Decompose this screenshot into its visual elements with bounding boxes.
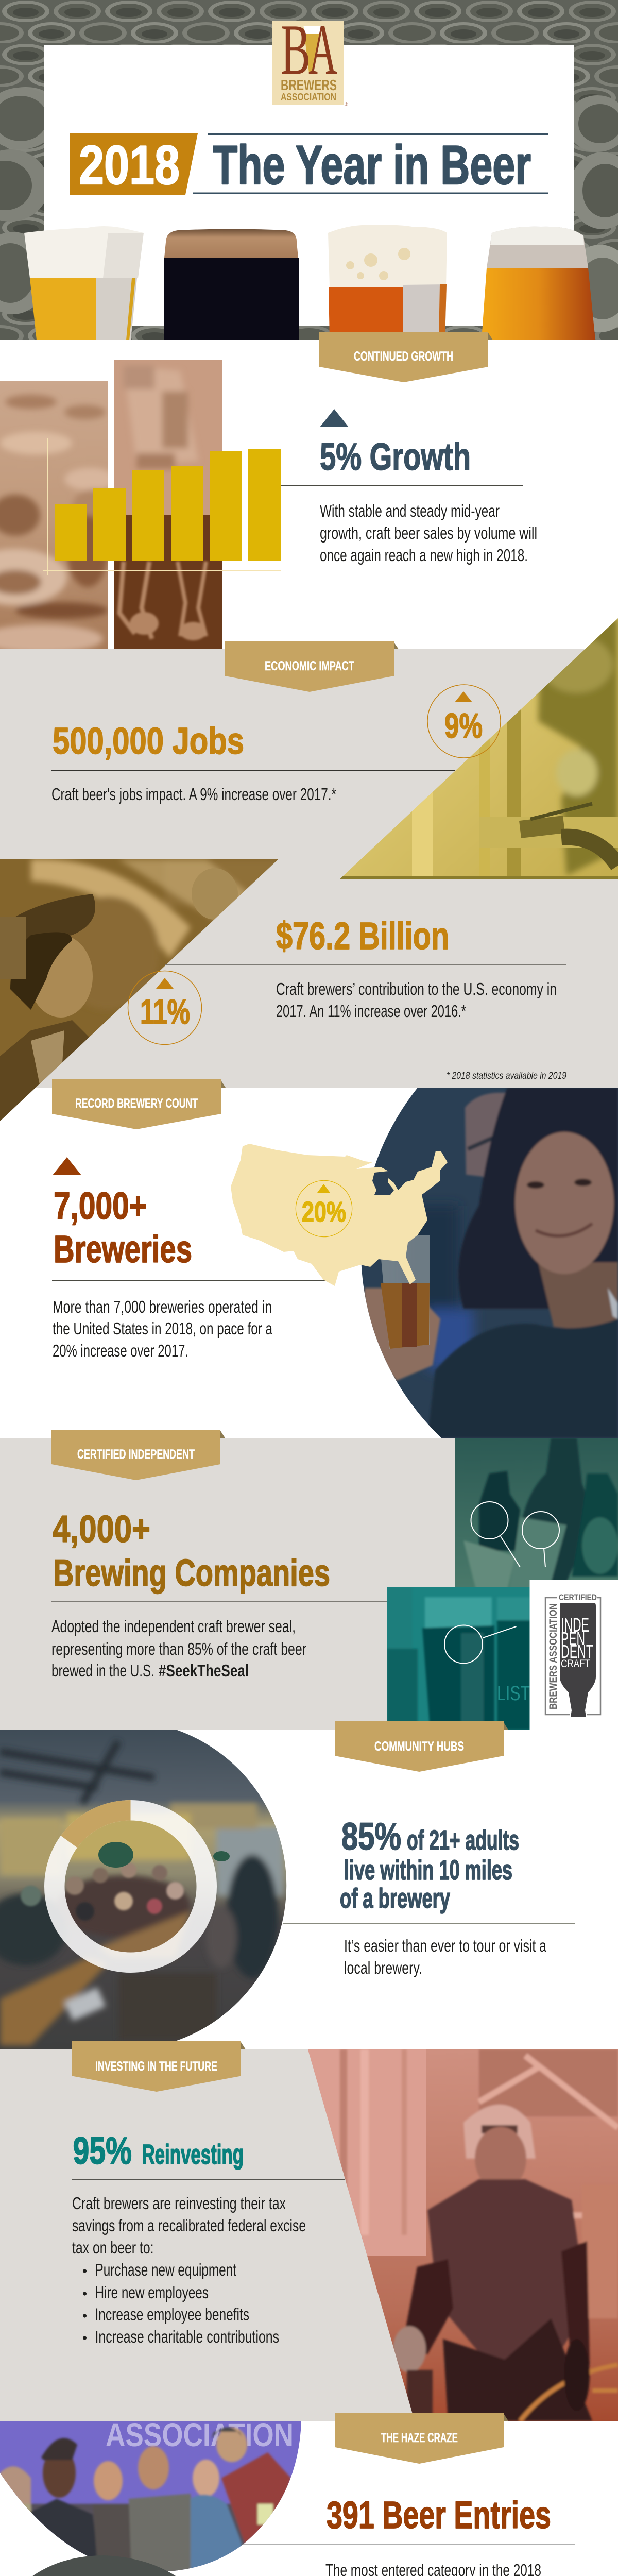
seal: certified independent craft: CERTIFIED	[559, 1592, 597, 1602]
logo: Brewers Association	[272, 10, 348, 107]
divider and body: breweries: the United States in 2018, on pace for a	[53, 1319, 272, 1338]
tag: the haze craze: THE HAZE CRAZE	[381, 2431, 458, 2445]
divider and body: billion	[165, 964, 566, 1021]
divider and body: breweries: More than 7,000 breweries operated in	[53, 1297, 272, 1316]
photo: brewer and valve, yellow tint	[340, 618, 618, 879]
tag: the haze craze	[335, 2413, 508, 2464]
heading: 391 Beer Entries: 391 Beer Entries	[327, 2494, 551, 2536]
heading: 4,000+ Brewing Companies: 4,000+	[53, 1509, 150, 1550]
white title panel	[44, 45, 574, 326]
heading: 4,000+ Brewing Companies: Brewing Companies	[53, 1552, 330, 1594]
tag: investing in the future	[72, 2041, 246, 2092]
divider and body: community: local brewery.	[344, 1958, 422, 1977]
divider and body: growth: growth, craft beer sales by volume will	[320, 523, 537, 543]
heading: 500,000 Jobs: 500,000 Jobs	[53, 721, 244, 762]
tag: community hubs: COMMUNITY HUBS	[374, 1739, 464, 1754]
tag: record brewery count	[52, 1079, 226, 1129]
map: United States	[231, 1144, 448, 1286]
heading: 5% Growth: 5% Growth	[320, 435, 471, 478]
glass: dark stout	[164, 229, 299, 340]
tag: continued growth: CONTINUED GROWTH	[354, 349, 453, 364]
divider and body: certified: Adopted the independent craft brewer seal,	[52, 1617, 296, 1636]
seal: certified independent craft: DENT	[561, 1641, 593, 1662]
heading: 4,000+ Brewing Companies	[53, 1509, 330, 1594]
title: 2018 badge: 2018	[79, 134, 180, 196]
seal: certified independent craft: PEN	[561, 1628, 585, 1649]
photo: crowded taproom	[0, 1730, 288, 2049]
seal: certified independent craft: BREWERS ASSOCIATION	[547, 1603, 559, 1709]
divider and body: breweries	[52, 1280, 327, 1360]
heading: 95% Reinvesting: 95%	[73, 2129, 132, 2172]
logo: Brewers Association: BREWERS	[281, 77, 337, 94]
heading: 95% Reinvesting: Reinvesting	[142, 2139, 244, 2170]
heading: 85% of 21+ adults: live within 10 miles	[344, 1855, 512, 1886]
callout: 20% increase	[296, 1180, 352, 1237]
callout: 20% increase: 20%	[302, 1196, 346, 1228]
logo: Brewers Association: A	[308, 10, 337, 90]
donut chart: 85 percent	[24, 1780, 237, 1993]
bullet list: uses of tax savings: Purchase new equipment	[95, 2260, 236, 2279]
divider and body: billion: 2017. An 11% increase over 2016.*	[276, 1002, 466, 1021]
divider and body: reinvesting	[72, 2179, 345, 2257]
callout: 11% increase: 11%	[140, 992, 190, 1031]
glass: copper ale	[482, 227, 595, 340]
seal: certified independent craft: CRAFT	[561, 1658, 590, 1670]
callouts: seal location circles	[444, 1502, 559, 1663]
callout: 9% increase: 9%	[444, 706, 483, 745]
divider and body: reinvesting: Craft brewers are reinvesting their tax	[72, 2194, 286, 2213]
bullet list: uses of tax savings: Increase employee benefits	[95, 2305, 249, 2324]
divider and body: jobs: Craft beer's jobs impact. A 9% increase over 2017.*	[52, 785, 336, 804]
divider and body: community	[283, 1923, 575, 1977]
header photo: stacked kegs	[0, 0, 618, 340]
tag: economic impact: ECONOMIC IMPACT	[265, 659, 354, 673]
heading: 85% of 21+ adults: of a brewery	[340, 1883, 450, 1914]
photo panel: beer cans	[0, 381, 116, 653]
seal: certified independent craft: INDE	[561, 1615, 589, 1636]
callout: 11% increase	[128, 971, 202, 1045]
divider and body: community: It’s easier than ever to tour or visit a	[344, 1936, 546, 1955]
logo: Brewers Association: ®	[345, 101, 348, 107]
tag: certified independent: CERTIFIED INDEPENDENT	[77, 1447, 195, 1462]
heading: 7,000+ Breweries: 7,000+	[54, 1184, 147, 1227]
tag: community hubs	[335, 1721, 508, 1772]
tag: certified independent	[52, 1430, 225, 1480]
glass: amber ale	[328, 225, 447, 340]
divider and body: certified	[52, 1601, 387, 1680]
bar chart: growth	[43, 438, 281, 575]
logo: Brewers Association: ASSOCIATION	[281, 92, 336, 103]
bullet list: uses of tax savings	[83, 2260, 279, 2346]
heading: 85% of 21+ adults	[340, 1815, 519, 1914]
seal: certified independent craft	[529, 1580, 618, 1730]
divider and body: certified: #SeekTheSeal	[159, 1661, 249, 1680]
heading: $76.2 Billion: $76.2 Billion	[276, 914, 449, 957]
callout: 9% increase	[427, 685, 501, 758]
tag: investing in the future: INVESTING IN THE FUTURE	[95, 2059, 217, 2074]
heading: 85% of 21+ adults: 85%	[341, 1815, 401, 1858]
divider and body: growth: With stable and steady mid-year	[320, 501, 500, 520]
heading: 7,000+ Breweries: Breweries	[54, 1228, 192, 1270]
tag: record brewery count: RECORD BREWERY COUNT	[75, 1096, 198, 1111]
photo: smiling woman with beer, navy tint	[355, 1088, 618, 1438]
photo: three hazy IPAs	[33, 2555, 176, 2576]
bullet list: uses of tax savings: Increase charitable contributions	[95, 2327, 279, 2346]
divider and body: breweries: 20% increase over 2017.	[53, 1341, 188, 1360]
photo: woman with beer, bronze tint	[0, 859, 278, 1121]
photo: cans with seal, teal tint: LIST	[497, 1682, 530, 1705]
icon: up triangle	[320, 409, 349, 427]
divider and body: growth: once again reach a new high in 2018.	[320, 546, 528, 565]
glass: pale ale	[24, 226, 144, 340]
divider and body: growth	[281, 485, 537, 565]
heading: 95% Reinvesting	[73, 2129, 244, 2172]
photo: brewer at work, rose tint	[308, 2049, 618, 2421]
logo: Brewers Association: B	[281, 10, 311, 90]
divider and body: certified: representing more than 85% of the craft beer	[52, 1639, 306, 1658]
divider and body: reinvesting: tax on beer to:	[72, 2238, 153, 2257]
tag: economic impact	[225, 641, 399, 692]
heading: 85% of 21+ adults: of 21+ adults	[407, 1825, 519, 1856]
photo: bottles with seal, teal tint	[455, 1438, 618, 1601]
photo: cans with seal, teal tint	[387, 1587, 530, 1730]
tag: continued growth	[319, 332, 493, 382]
footnote: * 2018 statistics available in 2019	[447, 1071, 566, 1081]
divider and body: certified: brewed in the U.S.	[52, 1661, 154, 1680]
bullet list: uses of tax savings: Hire new employees	[95, 2283, 209, 2302]
heading: 7,000+ Breweries	[54, 1184, 192, 1270]
photo: award winners on stage: ASSOCIATION	[106, 2416, 294, 2453]
divider and body: reinvesting: savings from a recalibrated federal excise	[72, 2216, 306, 2235]
photo panel: bottles and paper	[114, 360, 222, 649]
photo: award winners on stage	[0, 2416, 309, 2576]
icon: up triangle	[53, 1157, 81, 1175]
